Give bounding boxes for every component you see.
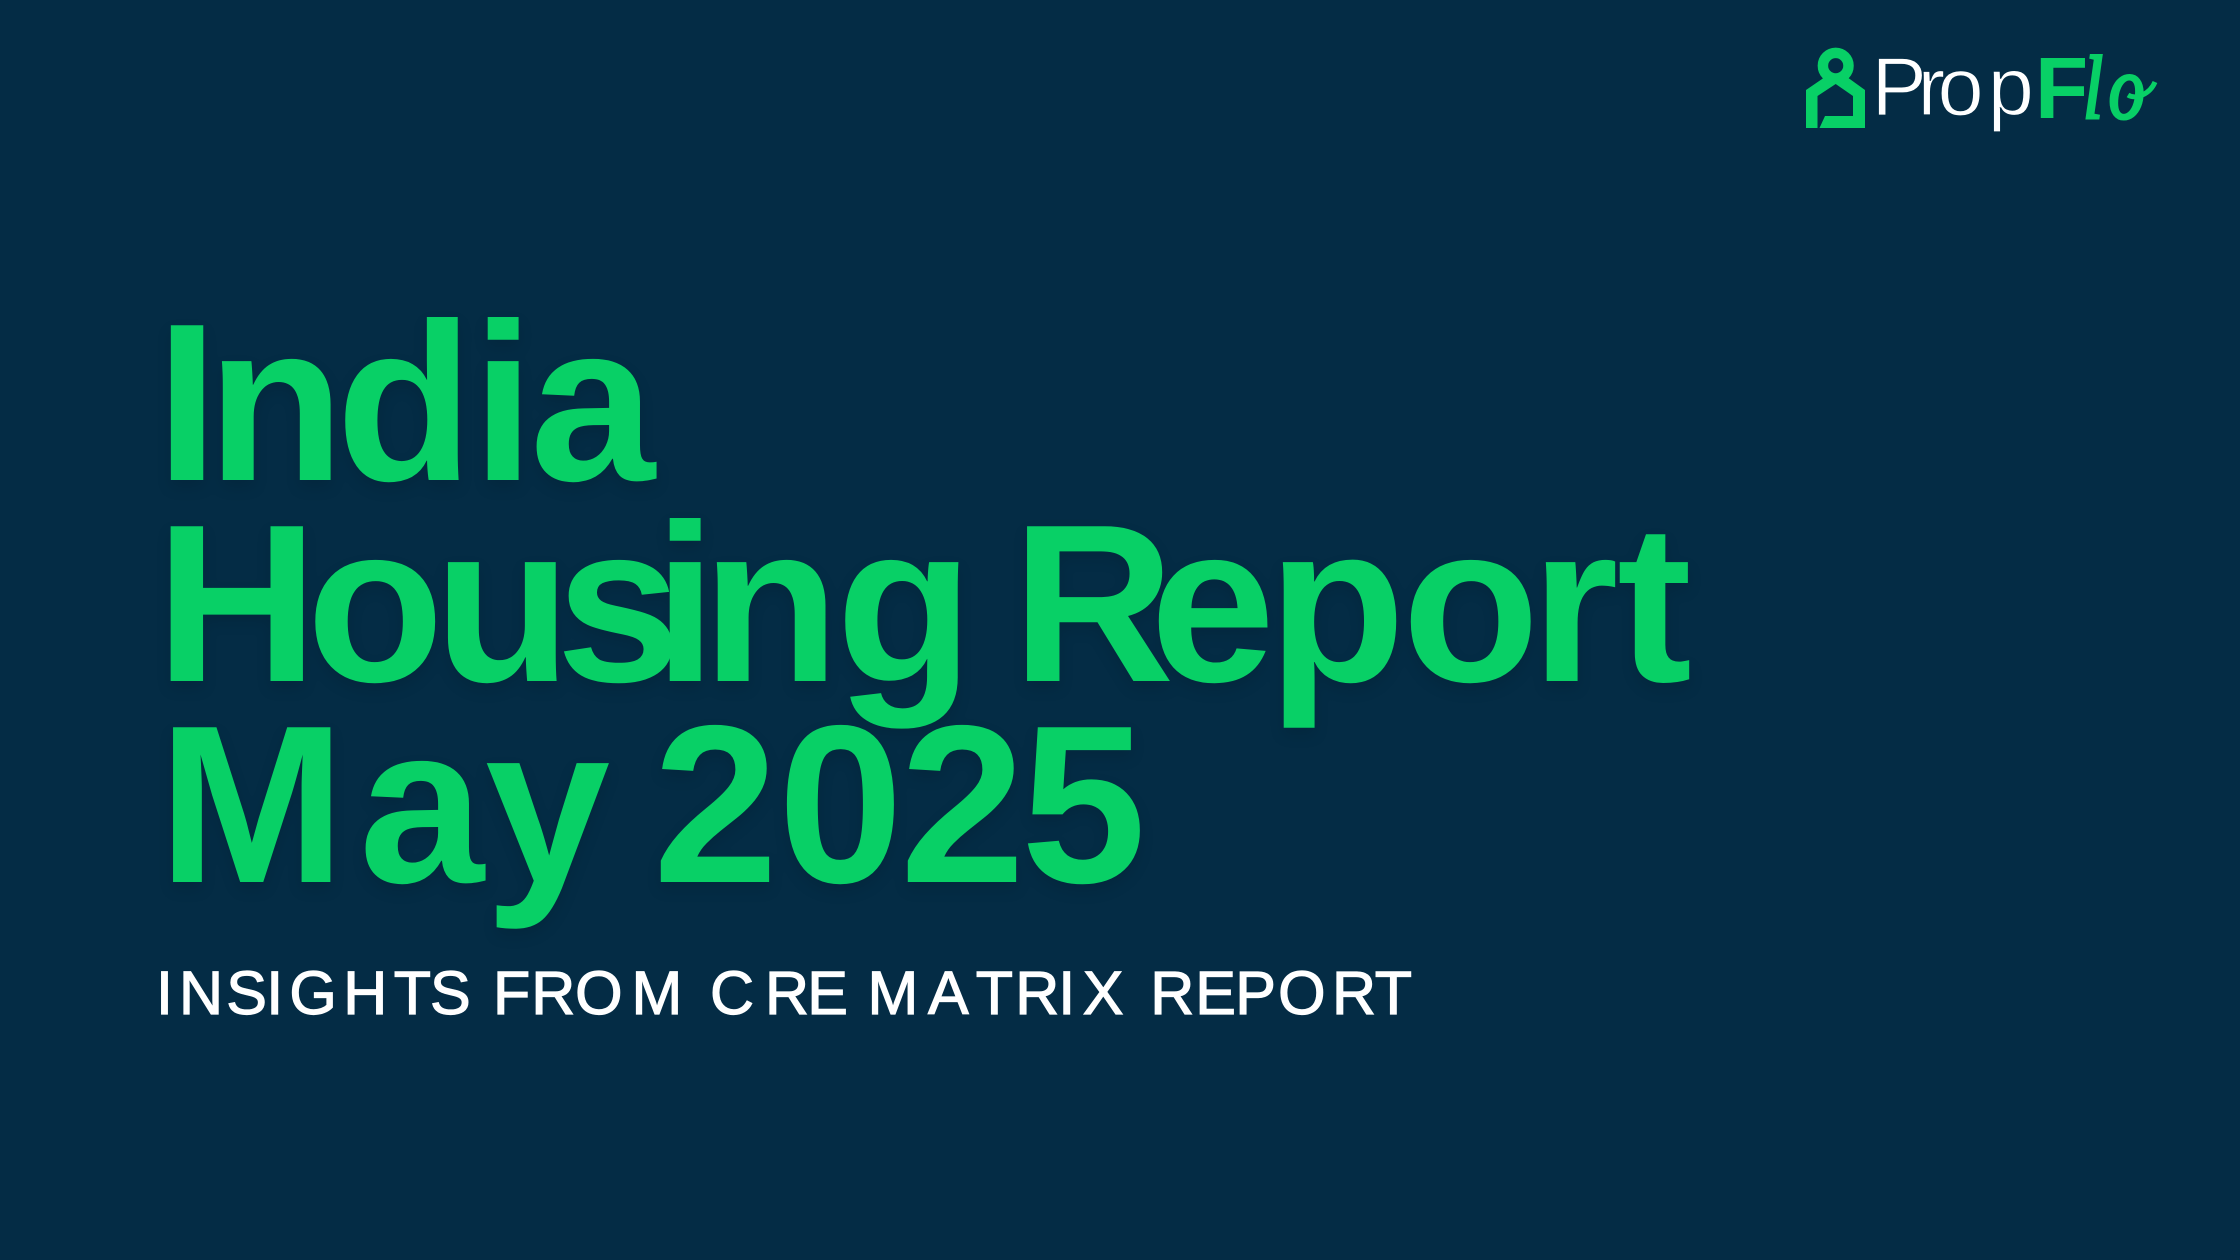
- wordmark: F: F: [2035, 40, 2088, 137]
- title line: May 2025: May 2025: [158, 678, 1146, 930]
- title line: India: India: [156, 276, 657, 528]
- title line: Housing Report: Housing Report: [156, 477, 1692, 729]
- subtitle: INSIGHTS FROM CRE MATRIX REPORT: [156, 959, 1412, 1027]
- title: [156, 276, 1692, 930]
- logo: PropFlo: [1806, 37, 2155, 138]
- swash tail: [2128, 82, 2155, 97]
- wordmark: Prop: Prop: [1872, 40, 2034, 133]
- wordmark: lo script: lo: [2083, 37, 2145, 138]
- icon: person and house: [1806, 53, 1865, 128]
